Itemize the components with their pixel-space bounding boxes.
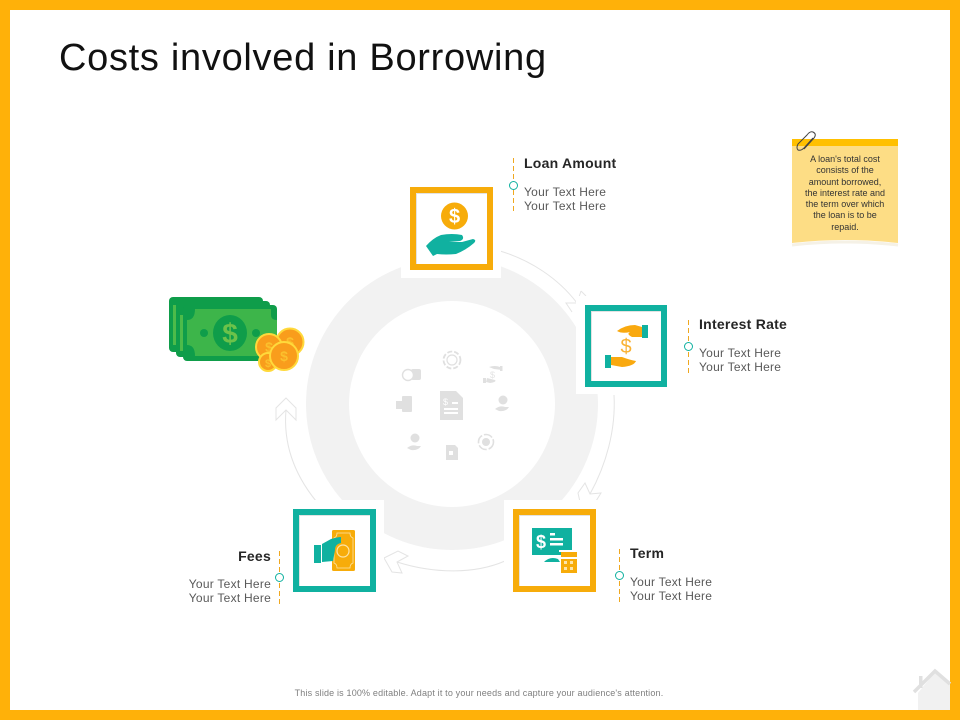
icon: small file bbox=[446, 445, 458, 460]
text block: term: Your Text Here bbox=[630, 575, 712, 589]
panel: interest rate icon box bbox=[576, 296, 676, 394]
panel: loan amount icon box bbox=[401, 178, 501, 278]
coins: $ bbox=[280, 348, 288, 364]
icon: hands exchanging dollar: $ bbox=[620, 336, 632, 358]
connector: fees bbox=[276, 551, 284, 604]
icon: paperclip bbox=[797, 132, 815, 150]
text block: interest rate bbox=[699, 316, 787, 374]
text block: fees bbox=[189, 548, 271, 605]
callout text: the term over which bbox=[806, 199, 884, 209]
callout: sticky note bbox=[792, 132, 898, 245]
icon: hands and dollar: $ bbox=[490, 370, 495, 380]
text block: term: Term bbox=[630, 545, 664, 561]
callout text: the loan is to be bbox=[813, 210, 877, 220]
central donut bbox=[306, 258, 598, 550]
icon: coin over hand left bbox=[407, 434, 421, 450]
text block: term bbox=[630, 545, 712, 603]
coins: $ bbox=[286, 334, 294, 350]
text block: fees: Your Text Here bbox=[189, 591, 271, 605]
connector: term bbox=[616, 549, 624, 602]
callout text: consists of the bbox=[816, 165, 874, 175]
icon: coin over hand right bbox=[495, 396, 509, 411]
text block: fees: Fees bbox=[238, 548, 271, 564]
coins: $ bbox=[265, 339, 273, 355]
icon: monitor and calculator: $ bbox=[536, 532, 546, 552]
text block: loan amount: Your Text Here bbox=[524, 199, 606, 213]
text block: fees: Your Text Here bbox=[189, 577, 271, 591]
coins bbox=[256, 328, 304, 371]
text block: loan amount: Loan Amount bbox=[524, 155, 616, 171]
footer note: This slide is 100% editable. Adapt it to your needs and capture your audience's attention. bbox=[295, 688, 663, 698]
callout text: A loan's total cost bbox=[810, 154, 880, 164]
callout text: amount borrowed, bbox=[809, 177, 881, 187]
illustration: banknotes and coins bbox=[169, 297, 304, 371]
text block: term: Your Text Here bbox=[630, 589, 712, 603]
icon: coin over hand: $ bbox=[449, 206, 460, 228]
panel: term icon box bbox=[504, 500, 604, 600]
icon: hand with banknote bbox=[314, 530, 355, 571]
text block: loan amount bbox=[524, 155, 616, 213]
text block: interest rate: Your Text Here bbox=[699, 346, 781, 360]
text block: loan amount: Your Text Here bbox=[524, 185, 606, 199]
callout text bbox=[805, 154, 885, 232]
coins: $ bbox=[265, 358, 271, 370]
text block: interest rate: Interest Rate bbox=[699, 316, 787, 332]
title: Costs involved in Borrowing bbox=[59, 37, 547, 79]
cycle arrows bbox=[276, 251, 614, 573]
icon: dashed coin bbox=[444, 352, 460, 368]
connector: loan amount bbox=[510, 158, 518, 212]
callout text: the interest rate and bbox=[805, 188, 885, 198]
text block: interest rate: Your Text Here bbox=[699, 360, 781, 374]
panel: fees icon box bbox=[284, 500, 384, 600]
callout text: repaid. bbox=[831, 222, 859, 232]
central icons group bbox=[396, 352, 509, 460]
home icon bbox=[914, 671, 950, 710]
illustration: banknotes and coins: $ bbox=[222, 318, 238, 349]
icon: coins bbox=[402, 369, 421, 380]
connector: interest rate bbox=[684, 320, 692, 373]
icon: document: $ bbox=[443, 397, 448, 407]
icon: cycle coin bbox=[478, 434, 494, 450]
icon: payment note bbox=[396, 396, 412, 412]
